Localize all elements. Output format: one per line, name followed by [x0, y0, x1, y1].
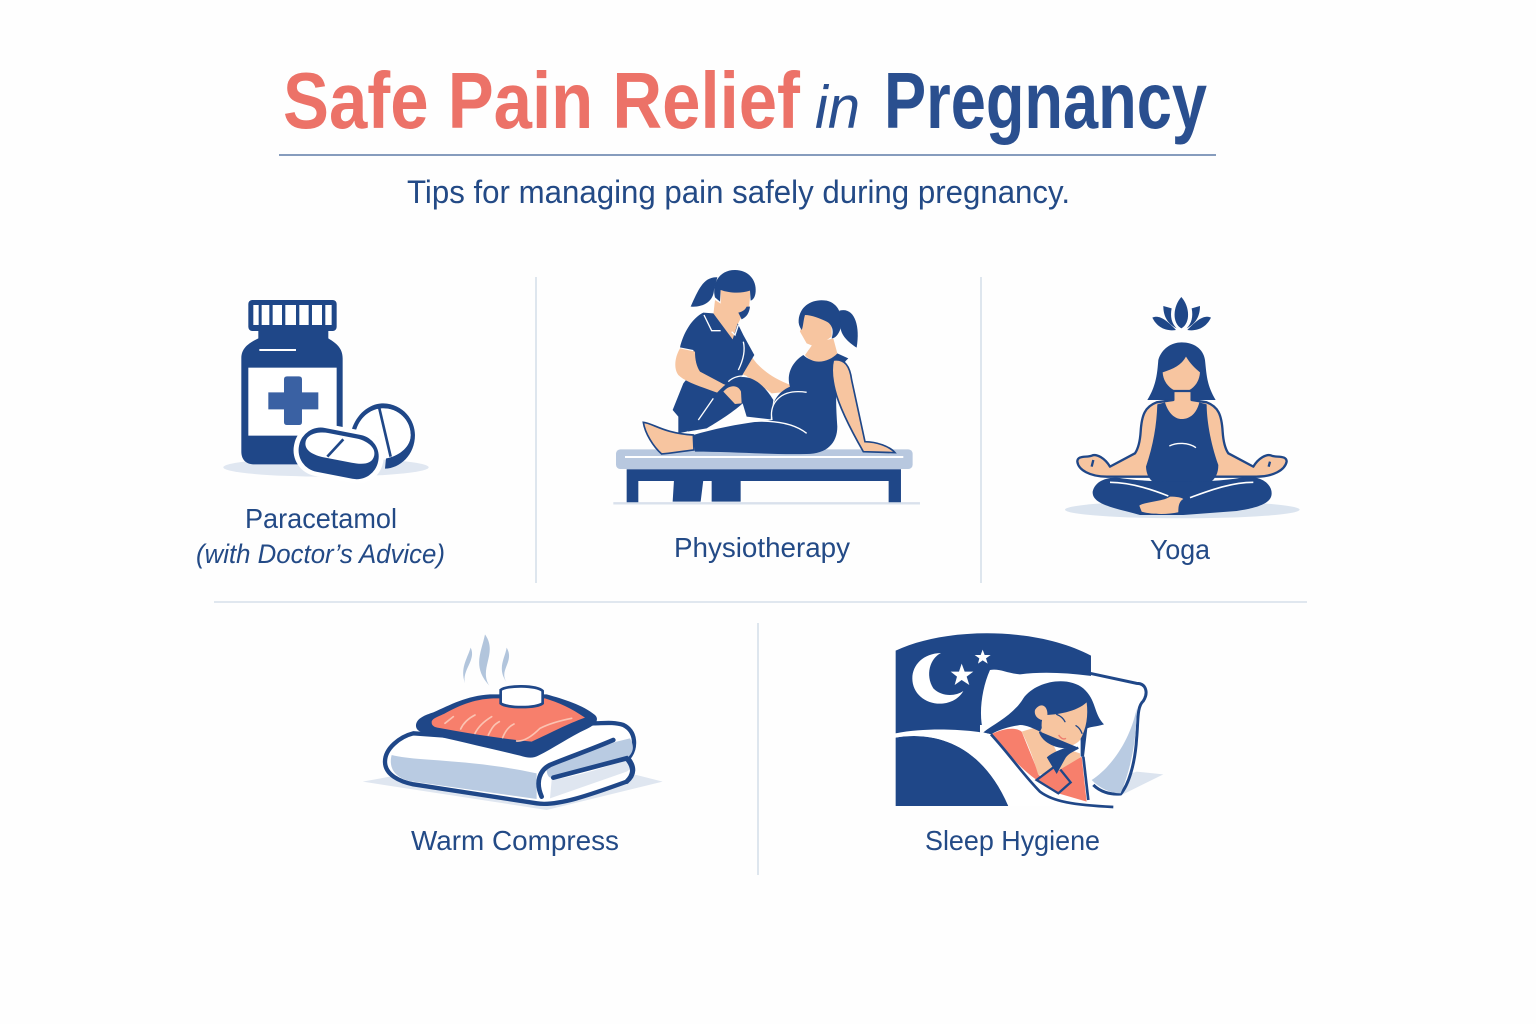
icon: medicine bottle and pills: [223, 300, 429, 488]
icon: meditating pregnant woman with lotus: [1065, 297, 1300, 518]
title: [283, 56, 1207, 145]
panel: physiotherapy: [613, 270, 920, 563]
blanket: [896, 730, 1118, 807]
label: with doctor's advice: (with Doctor’s Advice): [196, 539, 445, 569]
face: [1042, 702, 1087, 746]
label: warm compress: Warm Compress: [411, 825, 619, 856]
icon: therapist and pregnant patient: [613, 270, 920, 503]
label: paracetamol: Paracetamol: [245, 503, 397, 534]
panel: yoga: [1065, 297, 1300, 565]
icon: hot water bottle on folded towel: [363, 634, 663, 810]
panel: sleep hygiene: [896, 633, 1163, 856]
label: physiotherapy: Physiotherapy: [674, 532, 850, 563]
hair: [983, 681, 1104, 757]
subtitle: Tips for managing pain safely during pregnancy.: [407, 174, 1070, 210]
title: Pregnancy: [884, 56, 1207, 145]
title: Safe Pain Relief: [283, 56, 800, 145]
label: sleep hygiene: Sleep Hygiene: [925, 825, 1100, 856]
title: in: [815, 74, 860, 141]
label: yoga: Yoga: [1150, 534, 1210, 565]
panel: paracetamol: [196, 300, 445, 569]
pyjamas and chest: [991, 729, 1040, 780]
icon: woman sleeping in bed at night: [896, 633, 1163, 807]
patient: [687, 377, 773, 432]
therapist: [717, 357, 791, 393]
panel: warm compress: [363, 634, 663, 856]
